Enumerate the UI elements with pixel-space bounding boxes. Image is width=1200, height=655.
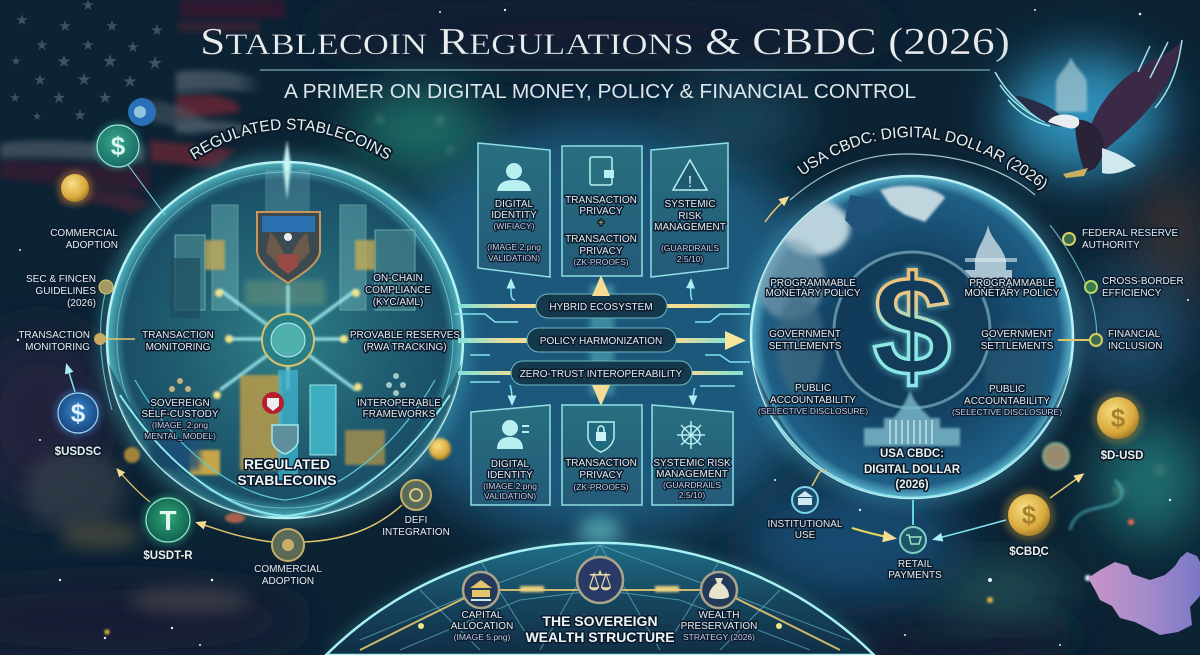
text: systemic risk: SYSTEMIC RISK — [653, 458, 731, 469]
label: public accountability right: ACCOUNTABILITY — [964, 396, 1050, 407]
panel: sovereign wealth structure — [326, 516, 874, 655]
panel: right outer nodes — [767, 228, 1200, 635]
subtitle: A PRIMER ON DIGITAL MONEY, POLICY & FINANCIAL CONTROL — [284, 81, 916, 103]
label: institutional use: USE — [795, 530, 816, 541]
label: institutional use: INSTITUTIONAL — [767, 519, 843, 530]
label: defi integration: INTEGRATION — [382, 527, 450, 538]
node: financial inclusion with connector — [1058, 334, 1102, 346]
icon: person — [497, 163, 531, 191]
text: transaction privacy: PRIVACY — [579, 246, 623, 257]
decorative American flag: ★ — [150, 22, 164, 39]
arc line above usa cbdc globe — [790, 154, 1035, 200]
icon: small blue globe — [128, 98, 156, 126]
text: systemic risk: (GUARDRAILS — [661, 243, 719, 253]
text: digital identity: DIGITAL — [491, 459, 530, 470]
outer ring arc on the left — [101, 290, 112, 410]
label: wealth preservation: PRESERVATION — [681, 621, 757, 632]
label: public accountability right: PUBLIC — [989, 384, 1025, 395]
panel: regulated stablecoins globe — [99, 140, 471, 540]
text: systemic risk: RISK — [678, 211, 702, 222]
text: systemic risk: MANAGEMENT — [654, 222, 726, 233]
label: commercial adoption left: ADOPTION — [66, 240, 118, 251]
icon: lock shield — [588, 422, 614, 452]
icon: teal dollar coin: $ — [111, 131, 126, 161]
label: provable reserves: (RWA TRACKING) — [363, 342, 447, 353]
label: public accountability left: (SELECTIVE DISCLOSURE) — [758, 406, 868, 416]
city towers — [107, 170, 463, 540]
label: government settlements left: SETTLEMENTS — [769, 341, 842, 352]
title: STABLECOIN REGULATIONS & CBDC (2026) — [200, 21, 1010, 63]
icon: usdt-r coin — [142, 494, 194, 546]
label: sec and fincen guidelines: SEC & FINCEN — [26, 274, 96, 285]
decorative American flag: ★ — [11, 54, 21, 68]
text: transaction privacy: TRANSACTION — [565, 195, 637, 206]
icon: eagle and capitol dome — [995, 40, 1182, 178]
decorative American flag: ★ — [102, 51, 118, 71]
label: provable reserves: PROVABLE RESERVES — [350, 330, 460, 341]
decorative American flag: ★ — [9, 90, 21, 105]
label: wealth preservation: STRATEGY (2026) — [683, 632, 755, 642]
globe continents — [752, 186, 1072, 500]
beams — [455, 304, 750, 386]
icon: cbdc coin — [1003, 489, 1055, 541]
node: guidelines — [99, 280, 113, 294]
label: capital allocation: CAPITAL — [462, 610, 503, 621]
label: commercial adoption left: COMMERCIAL — [50, 228, 118, 239]
decorative American flag: ★ — [98, 90, 112, 107]
icon: capitol building — [864, 390, 960, 446]
icon: small red chip — [225, 513, 245, 523]
label: sovereign self-custody: MENTAL_MODEL) — [144, 431, 216, 441]
connector: globe to retail payments — [912, 500, 914, 525]
label: capital allocation: (IMAGE 5.png) — [454, 632, 511, 642]
label: transaction monitoring outer: MONITORING — [25, 342, 90, 353]
panel: systemic risk bottom — [652, 405, 733, 505]
panel: systemic risk top — [651, 143, 728, 277]
label: capital allocation: ALLOCATION — [451, 621, 513, 632]
heading: usa cbdc curved: USA CBDC: DIGITAL DOLLAR (2026) — [795, 124, 1048, 192]
heading: usa cbdc digital dollar inner: USA CBDC: — [880, 448, 944, 460]
icon: bank building — [463, 572, 499, 608]
heading: the sovereign wealth structure: WEALTH STRUCTURE — [525, 629, 675, 645]
text: digital identity: DIGITAL — [495, 199, 534, 210]
arrow: zero trust to lower panels — [510, 385, 695, 403]
label: transaction monitoring inner: TRANSACTION — [142, 330, 214, 341]
arrow: upward from usdsc — [67, 366, 75, 392]
label: programmable monetary policy left: MONETARY POLICY — [765, 288, 861, 299]
icon: small copper coin — [124, 447, 140, 463]
icon: glowing dollar sign: $ — [873, 247, 951, 406]
label: interoperable frameworks: FRAMEWORKS — [363, 409, 436, 420]
label: usdt-r: $USDT-R — [143, 550, 193, 562]
central hub and spokes — [213, 285, 362, 480]
node: transaction monitoring with connector — [94, 333, 135, 345]
label: public accountability right: (SELECTIVE DISCLOSURE) — [952, 407, 1062, 417]
icon: network wheel — [677, 421, 705, 449]
label: interoperable frameworks: INTEROPERABLE — [357, 398, 441, 409]
icon: small check shield — [272, 425, 298, 454]
icon: usdt-r coin: T — [159, 505, 177, 536]
label: programmable monetary policy right: PROGRAMMABLE — [969, 278, 1055, 289]
decorative American flag: ★ — [35, 37, 49, 54]
pill: zero-trust interoperability: ZERO-TRUST INTEROPERABILITY — [520, 369, 683, 380]
icon: money bag — [701, 572, 737, 608]
label: on-chain compliance: ON-CHAIN — [373, 273, 423, 284]
panel: digital identity bottom — [471, 405, 550, 505]
label: federal reserve authority: AUTHORITY — [1082, 240, 1140, 251]
icon: defi node — [401, 480, 431, 510]
arrow: institutional use to retail payments — [852, 528, 893, 538]
icon: d-usd coin: $ — [1111, 403, 1126, 433]
node: federal reserve — [1063, 233, 1075, 245]
text: digital identity: (WIFIACY) — [493, 221, 535, 231]
label: cross-border efficiency: EFFICIENCY — [1102, 288, 1162, 299]
icon: sovereign self-custody network — [169, 378, 191, 392]
panel: transaction privacy top — [562, 146, 642, 276]
icon: eagle shield — [257, 212, 320, 283]
text: transaction privacy: PRIVACY — [579, 470, 623, 481]
label: public accountability left: PUBLIC — [795, 383, 831, 394]
heading: the sovereign wealth structure: THE SOVEREIGN — [542, 613, 658, 629]
label: federal reserve authority: FEDERAL RESERVE — [1082, 228, 1178, 239]
text: digital identity: VALIDATION) — [488, 253, 540, 263]
icon: usdsc coin: $ — [71, 398, 86, 428]
label: retail payments: RETAIL — [898, 559, 933, 570]
heading: regulated stablecoins curved: REGULATED STABLECOINS — [188, 117, 393, 162]
label: sec and fincen guidelines: GUIDELINES — [35, 286, 96, 297]
text: systemic risk: SYSTEMIC — [664, 199, 716, 210]
text: transaction privacy: TRANSACTION — [565, 234, 637, 245]
pill: policy harmonization: POLICY HARMONIZATION — [540, 336, 662, 347]
label: cbdc: $CBDC — [1009, 546, 1049, 558]
label: public accountability left: ACCOUNTABILITY — [770, 395, 856, 406]
decorative teal wisp — [1070, 480, 1122, 530]
icon: balance scales: ⚖ — [587, 564, 613, 597]
icon: d-usd coin — [1092, 392, 1144, 444]
label: government settlements right: GOVERNMENT — [981, 329, 1053, 340]
icon: small pink coin — [1043, 443, 1069, 469]
decorative American flag: ★ — [126, 39, 140, 56]
title divider with glow — [260, 69, 990, 71]
icon: small gold coin — [57, 170, 93, 206]
text: systemic risk: 2.5/10) — [677, 254, 703, 264]
text: digital identity: IDENTITY — [487, 470, 533, 481]
label: programmable monetary policy left: PROGRAMMABLE — [770, 278, 856, 289]
text: systemic risk: 2.5/10) — [679, 490, 705, 500]
decorative American flag: ★ — [105, 18, 119, 35]
pill: zero-trust interoperability — [511, 361, 692, 385]
panel: usa cbdc globe — [742, 167, 1082, 507]
icon: interoperable frameworks network — [386, 373, 406, 396]
decorative American flag — [0, 0, 285, 214]
label: sec and fincen guidelines: (2026) — [67, 298, 96, 309]
icon: usdsc coin — [54, 389, 102, 437]
label: transaction monitoring outer: TRANSACTION — [18, 330, 90, 341]
text: transaction privacy: TRANSACTION — [565, 458, 637, 469]
decorative American flag: ★ — [147, 53, 163, 73]
label: on-chain compliance: (KYC/AML) — [373, 297, 423, 308]
label: retail payments: PAYMENTS — [888, 570, 942, 581]
arrow: cbdc to d-usd — [1050, 475, 1082, 498]
icon: retail payments cart — [900, 527, 926, 553]
label: sovereign self-custody: SELF-CUSTODY — [141, 409, 219, 420]
icon: small red badge — [262, 392, 284, 414]
decorative American flag: ★ — [73, 107, 87, 124]
label: wealth preservation: WEALTH — [699, 610, 739, 621]
icon: institutional use — [792, 470, 826, 513]
decorative American flag: ★ — [122, 72, 138, 91]
icon: teal dollar coin — [94, 122, 165, 215]
icon: balance scales — [577, 557, 623, 603]
text: transaction privacy: (ZK-PROOFS) — [573, 482, 629, 492]
panel: central bridge — [455, 281, 750, 403]
label: defi integration: DEFI — [405, 515, 427, 526]
icon: warning triangle: ! — [688, 174, 692, 191]
decorative American flag: ★ — [56, 52, 72, 71]
label: transaction monitoring inner: MONITORING — [146, 342, 211, 353]
text: transaction privacy: + — [598, 218, 604, 229]
label: sovereign self-custody: (IMAGE_2.png — [152, 420, 208, 430]
label: sovereign self-custody: SOVEREIGN — [150, 398, 210, 409]
label: d-usd: $D-USD — [1101, 450, 1143, 462]
arrow: commercial adoption to usdt-r — [198, 523, 272, 542]
label: financial inclusion: INCLUSION — [1108, 341, 1162, 352]
arrow: hybrid ecosystem to upper panels — [511, 281, 692, 300]
connector: commercial adoption to defi — [304, 505, 402, 542]
text: digital identity: (IMAGE 2.png — [483, 481, 537, 491]
label: usdsc: $USDSC — [55, 446, 101, 458]
icon: glowing dollar sign: $ — [873, 247, 951, 406]
pill: policy harmonization — [527, 328, 676, 352]
decorative American flag: ★ — [32, 111, 42, 123]
label: government settlements left: GOVERNMENT — [769, 329, 841, 340]
decorative American flag: ★ — [81, 37, 95, 54]
heading: usa cbdc digital dollar inner: (2026) — [895, 479, 929, 491]
text: systemic risk: MANAGEMENT — [656, 469, 728, 480]
decorative American flag: ★ — [52, 90, 66, 107]
label: financial inclusion: FINANCIAL — [1108, 329, 1161, 340]
arrow: outer ring connecting right-hand nodes — [1050, 225, 1097, 345]
icon: cbdc coin: $ — [1022, 500, 1037, 530]
heading: regulated stablecoins inner: REGULATED — [244, 456, 330, 472]
text: digital identity: (IMAGE 2.png — [487, 242, 541, 252]
panel: transaction privacy bottom — [562, 405, 642, 505]
icon: person with list — [497, 420, 529, 449]
arrow: usdt-r to usdsc — [118, 470, 150, 502]
decorative American flag: ★ — [76, 70, 92, 89]
icon: china map — [1085, 552, 1200, 635]
heading: usa cbdc digital dollar inner: DIGITAL DOLLAR — [864, 464, 961, 476]
node: cross-border — [1085, 281, 1097, 293]
icon: document lock — [590, 157, 614, 185]
label: on-chain compliance: COMPLIANCE — [365, 285, 431, 296]
panel: digital identity top — [478, 143, 550, 277]
label: commercial adoption bottom: ADOPTION — [262, 576, 314, 587]
decorative American flag: ★ — [58, 18, 72, 35]
icon: small gold coin right — [429, 438, 451, 460]
decorative American flag: ★ — [33, 72, 47, 89]
text: systemic risk: (GUARDRAILS — [663, 480, 721, 490]
heading: regulated stablecoins inner: STABLECOINS — [237, 472, 337, 488]
arrow: cbdc to retail payments — [935, 520, 1006, 539]
arrow: arc into usa cbdc heading — [765, 198, 787, 222]
text: transaction privacy: PRIVACY — [579, 206, 623, 217]
icon: commercial adoption node — [272, 529, 304, 561]
label: commercial adoption bottom: COMMERCIAL — [254, 564, 322, 575]
pill: hybrid ecosystem — [536, 294, 667, 318]
panel: left outer nodes — [18, 98, 451, 587]
text: transaction privacy: (ZK-PROOFS) — [573, 257, 629, 267]
text: digital identity: IDENTITY — [491, 210, 537, 221]
label: government settlements right: SETTLEMENTS — [981, 341, 1054, 352]
label: cross-border efficiency: CROSS-BORDER — [1102, 276, 1184, 287]
decorative American flag: ★ — [15, 12, 29, 29]
label: programmable monetary policy right: MONETARY POLICY — [964, 288, 1060, 299]
network lines — [360, 545, 850, 650]
pill: hybrid ecosystem: HYBRID ECOSYSTEM — [549, 302, 653, 313]
text: digital identity: VALIDATION) — [484, 491, 536, 501]
